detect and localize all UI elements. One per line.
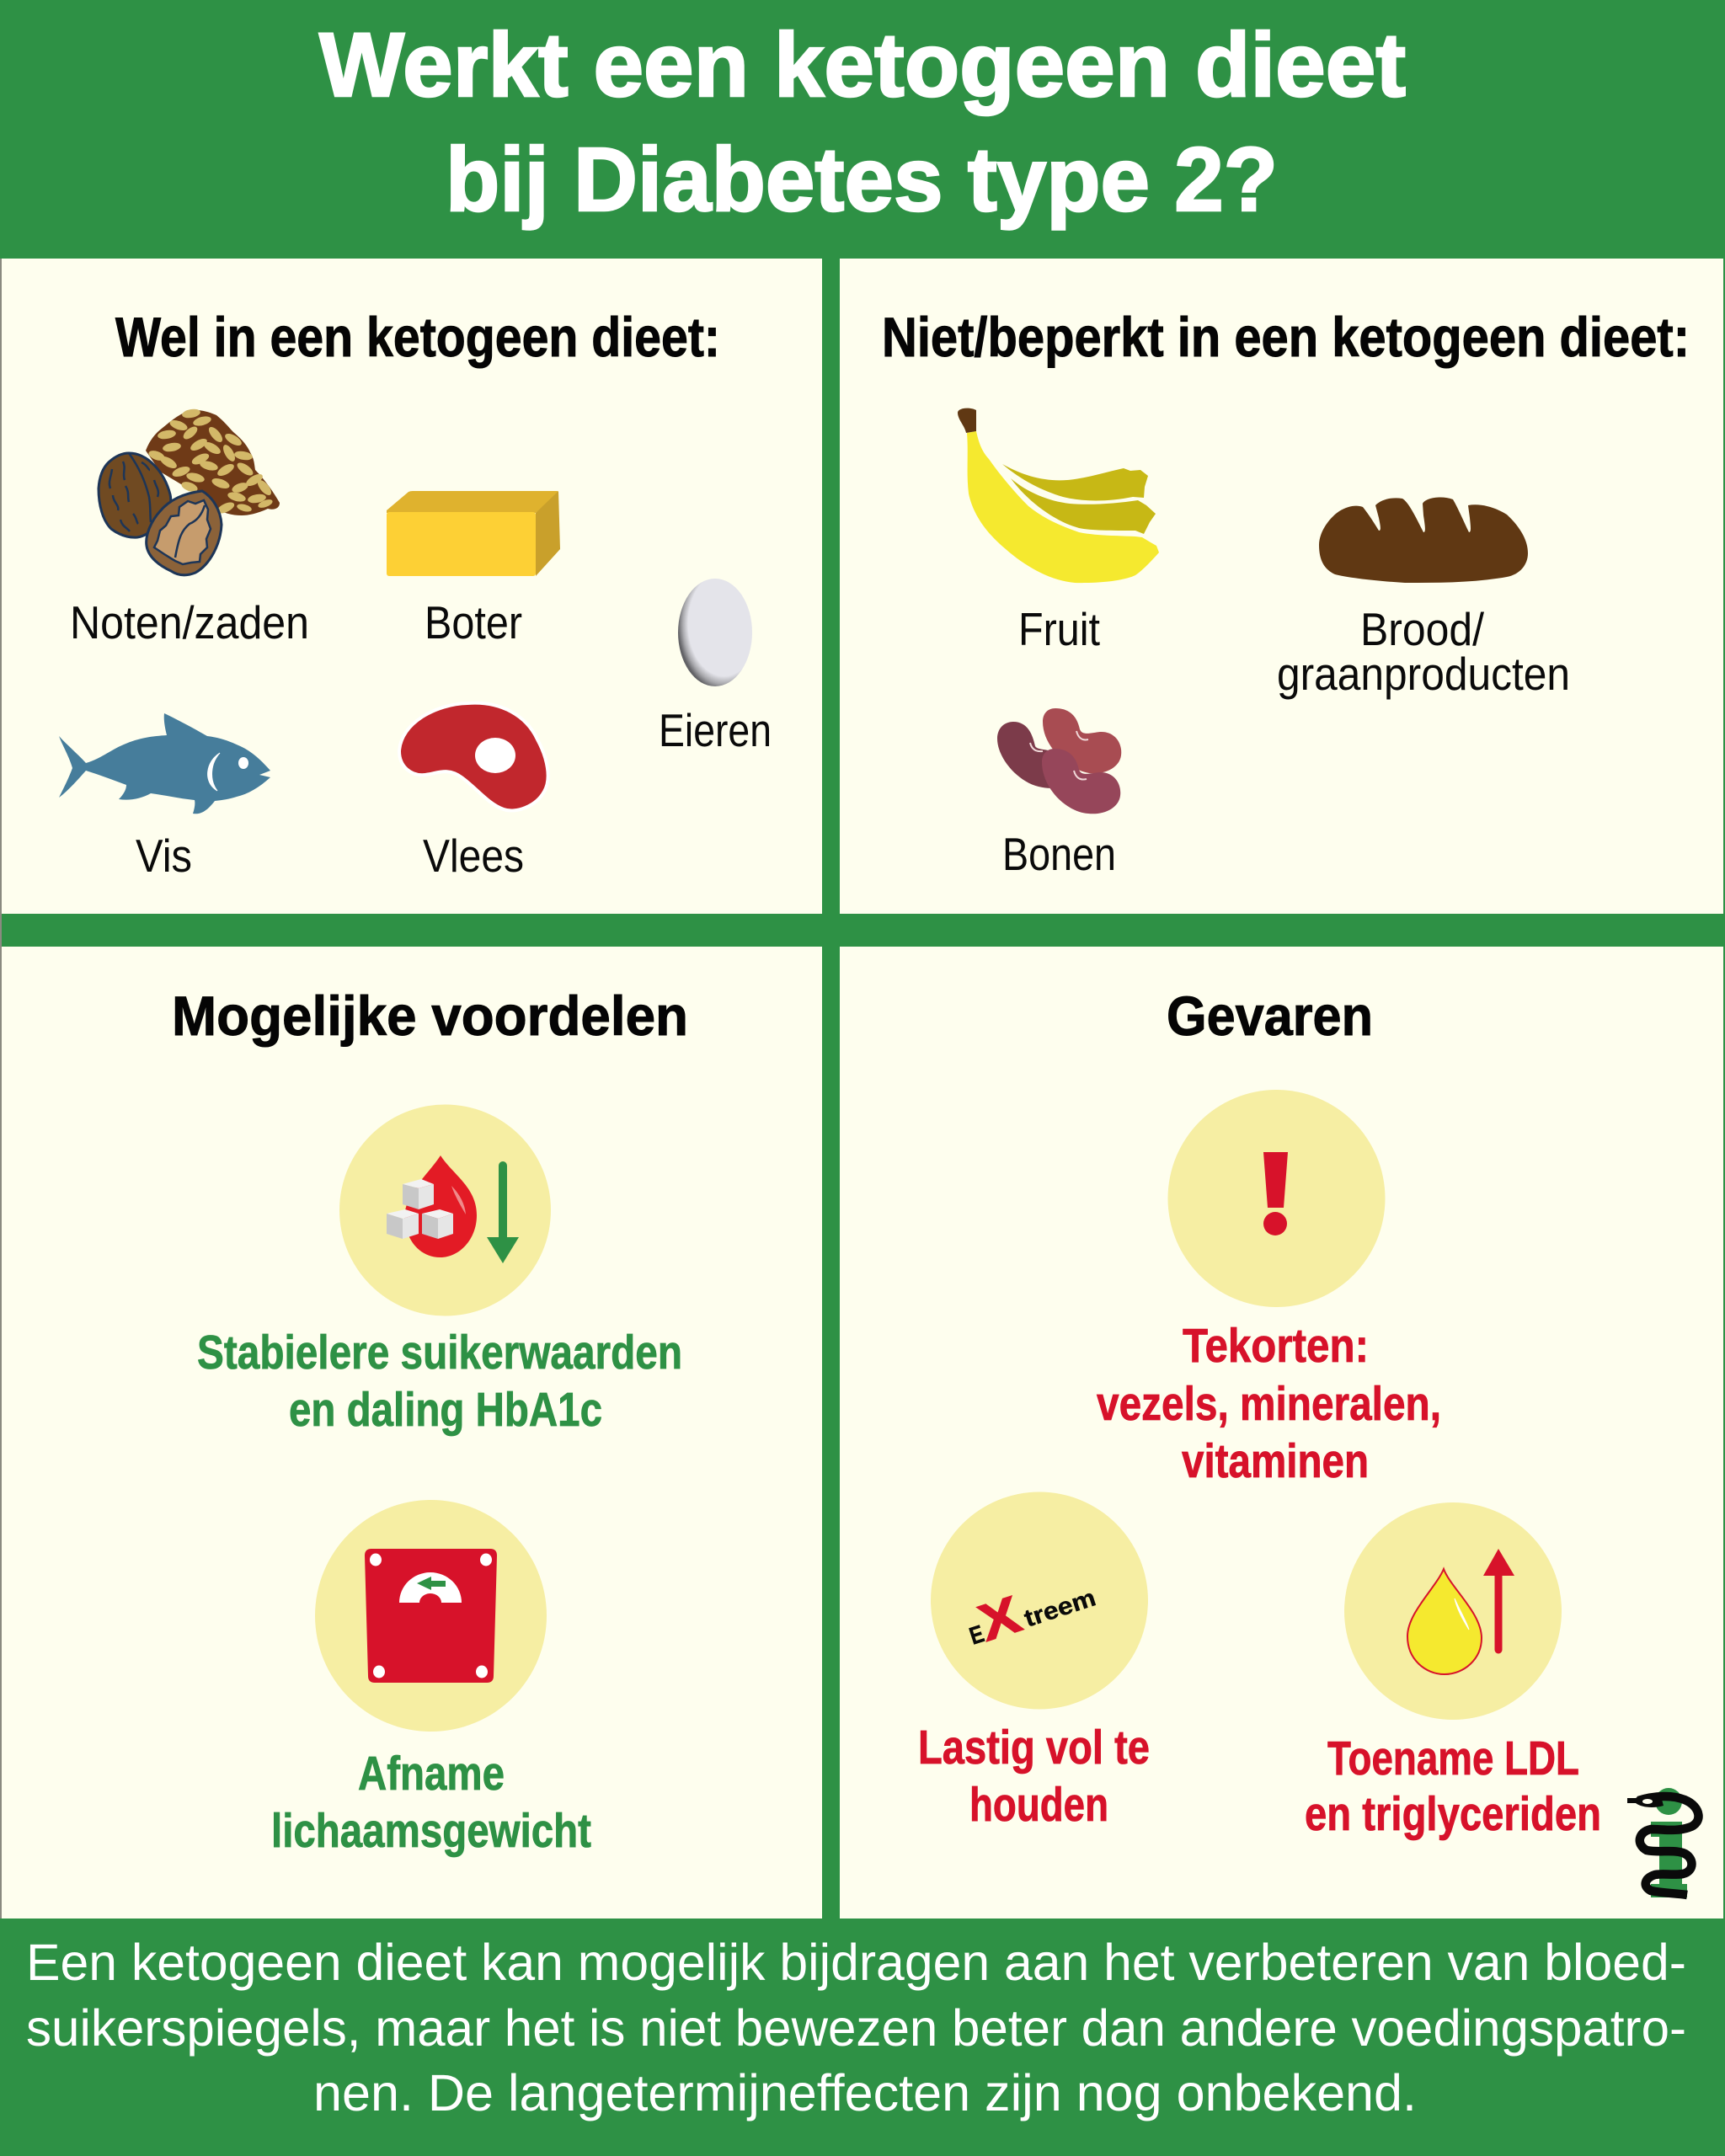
text: toename ldl en triglyceriden: [1305, 1732, 1601, 1841]
icon: weighing scale: [315, 1500, 547, 1732]
text: toename ldl en triglyceriden: en triglyceriden: [1305, 1787, 1601, 1841]
label: brood/graanproducten: graanproducten: [1277, 648, 1570, 700]
footer text: Een ketogeen dieet kan mogelijk bijdragen aan het verbeteren van bloed-: [26, 1934, 1686, 1991]
text: stabielere suikerwaarden: [197, 1326, 682, 1437]
text: lastig vol te houden: [918, 1721, 1150, 1832]
footer text: nen. De langetermijneffecten zijn nog onbekend.: [313, 2064, 1417, 2121]
text: lastig vol te houden: Lastig vol te: [918, 1721, 1150, 1774]
text: tekorten: vezels, mineralen,: [1097, 1377, 1441, 1431]
icon: snake logo: [1627, 1788, 1698, 1897]
icon: extreem: E: [966, 1620, 987, 1651]
title: bij Diabetes type 2?: [446, 128, 1278, 230]
text: tekorten: [1097, 1319, 1441, 1488]
icon: bread: [1319, 498, 1528, 583]
icon: extreem: [931, 1492, 1148, 1710]
text: stabielere suikerwaarden: en daling HbA1c: [289, 1383, 602, 1437]
heading: gevaren: Gevaren: [1167, 985, 1373, 1047]
icon: meat: [399, 703, 548, 810]
panel: gevaren: [840, 947, 1723, 1919]
label: noten/zaden: Noten/zaden: [70, 596, 309, 648]
label: vis: Vis: [136, 830, 192, 882]
label: vlees: Vlees: [423, 830, 524, 882]
footer text: suikerspiegels, maar het is niet bewezen beter dan andere voedingspatro-: [26, 1999, 1686, 2057]
text: toename ldl en triglyceriden: Toename LDL: [1327, 1732, 1579, 1785]
text: stabielere suikerwaarden: Stabielere suikerwaarden: [197, 1326, 682, 1380]
text: afname lichaamsgewicht: Afname: [358, 1747, 505, 1801]
panel: mogelijke voordelen: [2, 947, 822, 1919]
icon: blood sugar down: [339, 1105, 551, 1315]
icon: extreem: treem: [1021, 1584, 1099, 1633]
text: lastig vol te houden: houden: [969, 1778, 1108, 1832]
icon: banana: [958, 408, 1159, 583]
icon: oil drop up: [1344, 1502, 1562, 1720]
text: tekorten: vitaminen: [1182, 1434, 1369, 1488]
icon: egg: [678, 579, 752, 686]
label: fruit: Fruit: [1018, 603, 1100, 655]
text: afname lichaamsgewicht: lichaamsgewicht: [271, 1804, 591, 1858]
icon: beans: [997, 708, 1121, 814]
text: tekorten: Tekorten:: [1183, 1319, 1369, 1373]
title: [319, 13, 1406, 230]
icon: exclamation: [1167, 1090, 1385, 1307]
label: eieren: Eieren: [659, 704, 772, 756]
footer text: [26, 1934, 1686, 2121]
label: brood/graanproducten: [1277, 603, 1570, 700]
heading: wel: Wel in een ketogeen dieet:: [115, 306, 720, 368]
title: Werkt een ketogeen dieet: [319, 13, 1406, 115]
label: boter: Boter: [425, 596, 522, 648]
label: brood/graanproducten: Brood/: [1360, 603, 1485, 655]
heading: mogelijke voordelen: Mogelijke voordelen: [172, 985, 688, 1047]
panel: niet/beperkt in een ketogeen dieet: [840, 259, 1723, 914]
label: bonen: Bonen: [1002, 828, 1116, 880]
icon: fish: [59, 713, 270, 814]
icon: butter: [387, 491, 560, 576]
text: afname lichaamsgewicht: [271, 1747, 591, 1858]
icon: nuts and seeds: [99, 408, 280, 575]
panel: wel in een ketogeen dieet: [2, 259, 822, 914]
icon: extreem: X: [972, 1585, 1028, 1652]
